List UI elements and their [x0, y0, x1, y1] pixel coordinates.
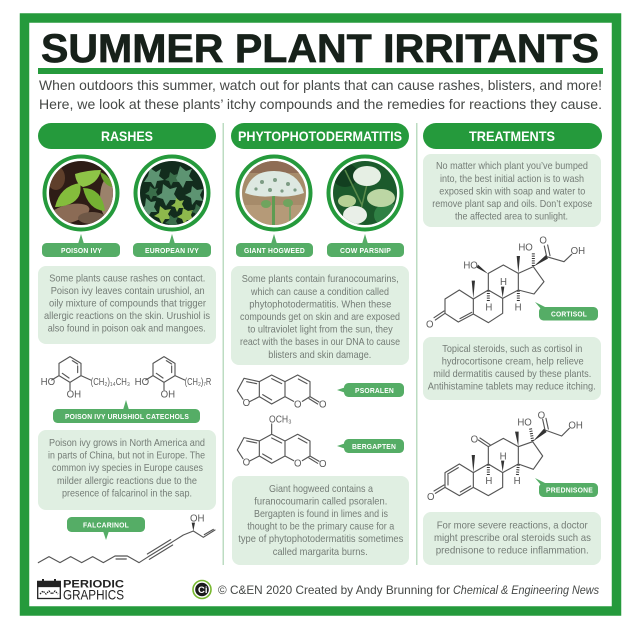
heading: phytophotodermatitis: PHYTOPHOTODERMATITIS: [238, 128, 402, 144]
chemical structure: prednisone: O: [471, 435, 479, 446]
column: treatments: [423, 123, 602, 565]
label: bergapten: [337, 439, 404, 453]
chemical structure: bergapten: O: [294, 459, 302, 470]
chemical structure: psoralen: O: [294, 399, 302, 410]
label: urushiol catechols: [53, 400, 200, 423]
chemical structure: cortisol: H: [515, 303, 522, 314]
intro text: [39, 77, 602, 112]
label: cortisol: CORTISOL: [551, 310, 587, 318]
chemical structure: urushiol catechols: (CH₂)₇R: [185, 377, 211, 388]
text panel: psoralen and bergapten: Bergapten is found in limes and is: [254, 508, 388, 520]
text panel: washing: [423, 154, 601, 227]
text panel: psoralen and bergapten: furanocoumarin called psoralen.: [254, 495, 387, 507]
text panel: psoralen and bergapten: [232, 476, 409, 565]
chemical structure: psoralen: O: [243, 398, 251, 409]
text panel: furanocoumarins: phytophotodermatitis. When these: [249, 298, 391, 310]
text panel: ivy distribution: [38, 430, 216, 510]
label: poison ivy: [42, 234, 120, 257]
text panel: psoralen and bergapten: Giant hogweed contains a: [269, 483, 373, 495]
chemical structure: bergapten: O: [319, 459, 327, 470]
text panel: furanocoumarins: Some plants contain furanocoumarins,: [242, 273, 399, 285]
text panel: washing: remove plant sap and oils. Don’t expose: [432, 198, 592, 210]
chemical structure: bergapten: OCH₃: [269, 414, 292, 425]
chemical structure: prednisone: OH: [568, 420, 583, 431]
intro text: Here, we look at these plants’ itchy compounds and the remedies for reactions they cause.: [39, 96, 602, 112]
chemical structure: prednisone: HO: [517, 418, 532, 429]
chemical structure: cortisol: H: [500, 277, 507, 288]
photo: giant hogweed: [238, 156, 310, 230]
text panel: furanocoumarins: which can cause a condition called: [250, 286, 389, 298]
logo: periodic graphics: GRAPHICS: [63, 586, 124, 602]
label: falcarinol: FALCARINOL: [83, 520, 129, 530]
credit line: [218, 583, 599, 597]
text panel: rash causes: [38, 266, 216, 344]
heading: treatments: [423, 123, 602, 149]
text panel: psoralen and bergapten: type of phytophotodermatitis sometimes: [238, 533, 403, 545]
label: urushiol catechols: POISON IVY URUSHIOL CATECHOLS: [65, 412, 189, 421]
text panel: rash causes: Some plants cause rashes on contact.: [49, 272, 205, 284]
text panel: rash causes: allergic reactions on the skin. Urushiol is: [44, 310, 210, 322]
chemical structure: cortisol: O: [539, 235, 547, 246]
chemical structure: urushiol catechols: (CH₂)₁₄CH₃: [91, 377, 130, 388]
chemical structure: falcarinol: OH: [190, 514, 205, 525]
label: prednisone: [535, 478, 598, 497]
logo: cen ci: Ci: [198, 585, 208, 596]
credit line: © C&EN 2020 Created by Andy Brunning for: [218, 583, 450, 597]
label: cow parsnip: [327, 234, 404, 257]
chemical structure: urushiol catechols: [41, 357, 211, 401]
heading: rashes: RASHES: [101, 128, 153, 144]
text panel: oral steroids: [423, 512, 601, 565]
chemical structure: prednisone: [427, 411, 583, 503]
chemical structure: cortisol: [426, 235, 585, 330]
chemical structure: prednisone: H: [485, 476, 492, 487]
label: giant hogweed: GIANT HOGWEED: [244, 246, 305, 255]
text panel: rash causes: also found in poison oak and mangoes.: [48, 322, 206, 334]
title rule: [38, 68, 603, 74]
heading: treatments: TREATMENTS: [469, 128, 555, 144]
text panel: furanocoumarins: blisters and skin damage.: [268, 349, 371, 361]
chemical structure: prednisone: H: [514, 476, 521, 487]
photo: poison ivy: [44, 156, 118, 230]
chemical structure: prednisone: H: [500, 451, 507, 462]
credit line: Chemical & Engineering News: [453, 583, 599, 597]
chemical structure: cortisol: HO: [518, 243, 533, 254]
text panel: ivy distribution: in parts of China, but not in Europe. The: [48, 450, 205, 462]
text panel: topical steroids: Topical steroids, such as cortisol in: [442, 343, 582, 355]
chemical structure: prednisone: O: [427, 492, 435, 503]
text panel: rash causes: Poison ivy leaves contain urushiol, an: [51, 285, 205, 297]
text panel: washing: exposed skin with soap and water to: [439, 185, 585, 197]
text panel: washing: the affected area to sunlight.: [455, 211, 568, 223]
label: psoralen: [337, 383, 404, 397]
chemical structure: psoralen: O: [319, 400, 327, 411]
text panel: ivy distribution: Poison ivy grows in North America and: [49, 437, 205, 449]
text panel: oral steroids: For more severe reactions, a doctor: [437, 520, 588, 532]
label: poison ivy: POISON IVY: [61, 246, 102, 255]
column: rashes: [38, 123, 216, 563]
chemical structure: urushiol catechols: HO: [135, 377, 150, 388]
icon: periodic calendar: [38, 579, 60, 598]
photo: european ivy: [136, 156, 208, 230]
label: cortisol: [535, 302, 598, 320]
chemical structure: cortisol: O: [426, 319, 434, 330]
text panel: psoralen and bergapten: thought to be the primary cause for a: [247, 521, 394, 533]
photo: cow parsnip: [328, 156, 402, 230]
text panel: topical steroids: [423, 337, 601, 400]
text panel: topical steroids: hydrocortisone cream, help relieve: [442, 355, 584, 367]
label: falcarinol: [67, 517, 145, 540]
text panel: ivy distribution: common ivy species in Europe causes: [52, 462, 203, 474]
logo: periodic graphics: PERIODIC: [63, 578, 124, 590]
logo: cen ci: [193, 580, 211, 598]
chemical structure: psoralen: [237, 375, 327, 411]
heading: rashes: [38, 123, 216, 149]
text panel: topical steroids: mild dermatitis caused by these plants.: [433, 368, 591, 380]
chemical structure: falcarinol: [38, 514, 215, 563]
label: european ivy: EUROPEAN IVY: [145, 246, 199, 255]
text panel: furanocoumarins: to ultraviolet light from the sun, they: [248, 324, 393, 336]
chemical structure: cortisol: HO: [463, 261, 478, 272]
label: psoralen: PSORALEN: [355, 386, 394, 395]
text panel: washing: No matter which plant you’ve bumped: [436, 160, 588, 172]
heading: phytophotodermatitis: [231, 123, 409, 149]
text panel: ivy distribution: presence of falcarinol in the sap.: [62, 487, 192, 499]
chemical structure: cortisol: OH: [571, 246, 585, 257]
text panel: furanocoumarins: [231, 266, 409, 365]
text panel: psoralen and bergapten: called margarita burns.: [273, 546, 368, 558]
column: phytophotodermatitis: [231, 123, 409, 565]
chemical structure: bergapten: O: [243, 457, 251, 468]
text panel: furanocoumarins: react with the bases in our DNA to cause: [240, 336, 400, 348]
text panel: washing: into, the best initial action is to wash: [440, 173, 584, 185]
title: SUMMER PLANT IRRITANTS: [41, 27, 599, 71]
text panel: topical steroids: Antihistamine tablets may reduce itching.: [428, 381, 596, 393]
text panel: oral steroids: might prescribe oral steroids such as: [434, 532, 591, 544]
chemical structure: bergapten: [237, 414, 327, 470]
label: cow parsnip: COW PARSNIP: [340, 246, 391, 255]
chemical structure: urushiol catechols: HO: [41, 377, 56, 388]
text panel: ivy distribution: milder allergic reactions due to the: [57, 475, 197, 487]
intro text: When outdoors this summer, watch out for plants that can cause rashes, blisters, and more!: [39, 77, 602, 93]
chemical structure: urushiol catechols: OH: [161, 390, 175, 401]
label: bergapten: BERGAPTEN: [352, 442, 396, 451]
label: european ivy: [133, 234, 211, 257]
logo: periodic graphics: [38, 578, 124, 602]
text panel: oral steroids: prednisone to reduce inflammation.: [436, 545, 589, 557]
chemical structure: urushiol catechols: OH: [67, 390, 81, 401]
label: prednisone: PREDNISONE: [546, 486, 593, 494]
text panel: rash causes: oily mixture of compounds that trigger: [49, 298, 206, 310]
label: giant hogweed: [236, 234, 313, 257]
text panel: furanocoumarins: compounds get on skin and are exposed: [240, 311, 400, 323]
chemical structure: prednisone: O: [538, 411, 546, 422]
chemical structure: cortisol: H: [485, 303, 492, 314]
